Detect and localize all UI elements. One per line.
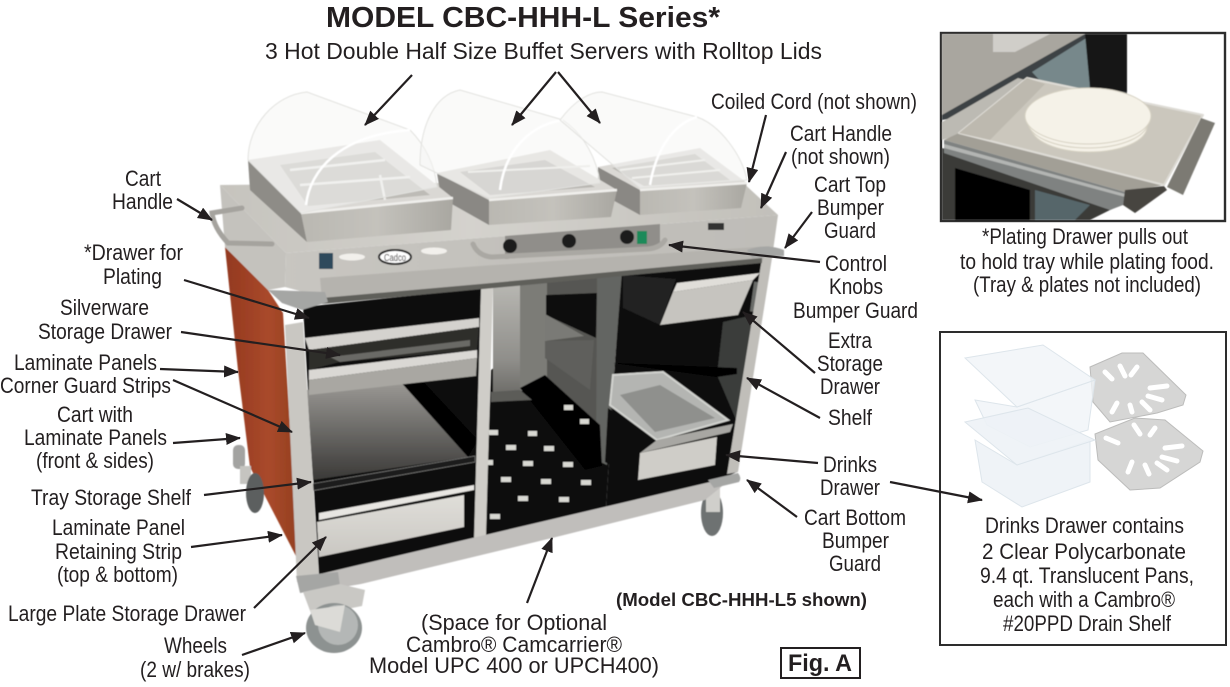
label: cart with laminate panels: (front & sides) <box>36 448 154 473</box>
front left caster <box>303 584 365 653</box>
plates <box>1025 88 1151 152</box>
arrow: shelf <box>747 378 820 418</box>
label: cart handle not shown: Cart Handle <box>790 121 892 146</box>
arrow: control knobs <box>669 245 820 262</box>
center floor and back <box>485 270 622 537</box>
bottom frame rail <box>320 478 732 590</box>
label: extra storage drawer: Storage <box>817 351 883 376</box>
left side top rail <box>220 185 286 290</box>
label: drinks drawer: Drinks <box>823 452 877 477</box>
rear right caster <box>701 484 723 536</box>
label: cart with laminate panels: Cart with <box>57 402 133 427</box>
pull flap <box>1167 118 1215 195</box>
background cabinet <box>942 34 1127 120</box>
label: drinks drawer: Drawer <box>820 475 880 500</box>
front frame posts <box>285 258 772 582</box>
drinks drawer with pan <box>605 372 733 480</box>
caption: drinks drawer contents: Drinks Drawer contains <box>985 513 1184 538</box>
caption: drinks drawer contents <box>980 513 1194 636</box>
label: drinks drawer <box>820 452 880 500</box>
bumper guards <box>268 246 784 593</box>
label: large plate storage drawer: Large Plate Storage Drawer <box>8 601 246 626</box>
label: control knobs bumper guard: Bumper Guard <box>793 298 918 323</box>
shelf in right bay <box>613 363 737 377</box>
control panel <box>503 224 660 259</box>
drawer front <box>1123 186 1167 213</box>
rolltop lid 2 <box>420 90 600 198</box>
label: drawer for plating <box>84 240 183 289</box>
arrow: corner guard strips <box>173 380 292 432</box>
label: optional camcarrier space: Model UPC 400 or UPCH400) <box>369 653 659 678</box>
caption: drinks drawer contents: #20PPD Drain Shelf <box>1003 611 1172 636</box>
cart top surface <box>220 180 778 253</box>
label: cart bottom bumper guard: Cart Bottom <box>804 505 906 530</box>
green switch <box>637 231 647 244</box>
arrow: tray storage shelf <box>204 482 311 495</box>
label: laminate panels, corner guard strips: Laminate Panels <box>14 350 157 375</box>
arrow: lid left <box>365 75 412 125</box>
label: laminate panel retaining strip <box>52 515 185 587</box>
panel: plating drawer photo <box>941 33 1225 221</box>
arrow: drinks drawer to pans <box>890 482 982 500</box>
rolltop lid 1 <box>248 92 437 213</box>
caption: drinks drawer contents: 9.4 qt. Translucent Pans, <box>980 563 1194 588</box>
label: silverware storage drawer: Storage Drawer <box>38 319 172 344</box>
label: shelf: Shelf <box>828 405 873 430</box>
brand badge: Cadco <box>384 253 406 264</box>
label: laminate panel retaining strip: (top & bottom) <box>57 562 178 587</box>
label: extra storage drawer: Drawer <box>820 374 880 399</box>
arrow: silverware drawer <box>181 332 340 355</box>
arrow: retaining strip <box>191 535 282 547</box>
clear pan lower <box>965 408 1095 507</box>
arrow: rear cart handle <box>761 152 786 208</box>
front bumper guard tube <box>473 240 665 257</box>
label: cart handle: Handle <box>112 189 173 214</box>
panel: drinks drawer contents <box>940 332 1226 645</box>
apron lower strip <box>320 246 770 300</box>
right inner wall <box>717 315 753 422</box>
label: silverware storage drawer <box>38 295 172 344</box>
label: optional camcarrier space <box>369 610 659 678</box>
arrow: cart with laminate panels <box>173 438 240 443</box>
slide rail <box>944 140 1125 210</box>
chafer pan 1 <box>248 140 453 242</box>
label: laminate panel retaining strip: Retaining Strip <box>55 539 182 564</box>
label: laminate panels, corner guard strips <box>0 350 171 398</box>
cart illustration <box>212 90 784 653</box>
subtitle: 3 Hot Double Half Size Buffet Servers with Rolltop Lids <box>265 38 822 64</box>
clear pan upper <box>965 345 1095 447</box>
label: cart bottom bumper guard: Bumper <box>822 528 889 553</box>
label: cart with laminate panels: Laminate Panels <box>24 425 167 450</box>
title: MODEL CBC-HHH-L Series* <box>326 2 721 34</box>
arrow: cart bottom bumper <box>747 480 797 517</box>
arrow: cart top bumper <box>785 212 812 248</box>
floor perforations <box>486 405 591 519</box>
arrow: optional space <box>527 538 552 603</box>
left bay back wall <box>307 380 468 480</box>
label: optional camcarrier space: Cambro® Camcarrier® <box>406 632 622 657</box>
extra storage drawer <box>623 273 760 325</box>
label: control knobs bumper guard: Control <box>825 251 887 276</box>
left bay interior <box>303 288 483 576</box>
tray side wall <box>944 133 1164 192</box>
label: control knobs bumper guard: Knobs <box>829 274 883 299</box>
label: optional camcarrier space: (Space for Optional <box>421 610 607 635</box>
label: laminate panels, corner guard strips: Corner Guard Strips <box>0 373 171 398</box>
arrow: laminate panels <box>160 369 238 372</box>
tray <box>959 78 1203 185</box>
label: drawer for plating: *Drawer for <box>84 240 183 265</box>
label: cart top bumper guard: Guard <box>824 218 876 243</box>
rolltop lid 3 <box>560 92 747 188</box>
chafer pan 3 <box>598 148 747 215</box>
label: wheels: (2 w/ brakes) <box>140 657 250 682</box>
arrow: cart handle <box>177 199 212 220</box>
arrow: drawer for plating <box>184 280 309 318</box>
label: cart bottom bumper guard: Guard <box>829 551 881 576</box>
label: laminate panel retaining strip: Laminate Panel <box>52 515 185 540</box>
back panels <box>493 282 520 394</box>
rear left caster <box>233 445 264 513</box>
cart handle <box>212 208 272 244</box>
caption: plating drawer: *Plating Drawer pulls out <box>982 224 1188 249</box>
label: cart handle: Cart <box>125 166 161 191</box>
label: cart top bumper guard <box>814 172 886 243</box>
label: drawer for plating: Plating <box>103 264 162 289</box>
label: control knobs bumper guard <box>793 251 918 323</box>
figure label: Fig. A <box>788 650 852 677</box>
label: cart handle not shown <box>790 121 892 169</box>
drain shelf upper <box>1090 353 1186 422</box>
arrow: drinks drawer <box>726 455 818 463</box>
arrow: coiled cord <box>749 115 766 182</box>
label: tray storage shelf: Tray Storage Shelf <box>31 485 192 510</box>
label: cart handle <box>112 166 173 214</box>
label: cart handle not shown: (not shown) <box>791 144 890 169</box>
label: extra storage drawer <box>817 328 883 399</box>
drain shelf lower <box>1095 418 1203 490</box>
lower cabinet <box>942 148 1120 220</box>
arrow: extra drawer <box>743 312 815 373</box>
caption: plating drawer <box>960 224 1214 297</box>
label: extra storage drawer: Extra <box>828 328 873 353</box>
arrow: large plate drawer <box>254 537 326 608</box>
label: coiled cord: Coiled Cord (not shown) <box>711 89 917 114</box>
arrow: wheels <box>242 633 305 655</box>
tray storage shelf <box>311 456 475 491</box>
silverware drawers <box>305 318 479 395</box>
label: wheels <box>140 633 250 682</box>
front apron <box>285 215 778 297</box>
power indicator and lamps <box>319 223 724 269</box>
caption: drinks drawer contents: each with a Cambro® <box>993 587 1175 612</box>
caption: drinks drawer contents: 2 Clear Polycarbonate <box>982 539 1186 564</box>
label: wheels: Wheels <box>164 633 227 658</box>
brand badge <box>379 250 411 264</box>
model note: (Model CBC-HHH-L5 shown) <box>616 590 867 610</box>
label: cart bottom bumper guard <box>804 505 906 576</box>
control knobs <box>503 239 517 253</box>
arrow: lid right <box>558 72 600 123</box>
label: silverware storage drawer: Silverware <box>60 295 149 320</box>
chafer pan 2 <box>437 150 617 225</box>
right bay interior <box>606 258 770 508</box>
arrow: lid middle <box>512 72 556 125</box>
label: cart top bumper guard: Bumper <box>817 195 884 220</box>
label: cart top bumper guard: Cart Top <box>814 172 886 197</box>
label: cart with laminate panels <box>24 402 167 473</box>
left laminate panel <box>225 247 298 560</box>
large plate storage drawer <box>317 485 474 557</box>
